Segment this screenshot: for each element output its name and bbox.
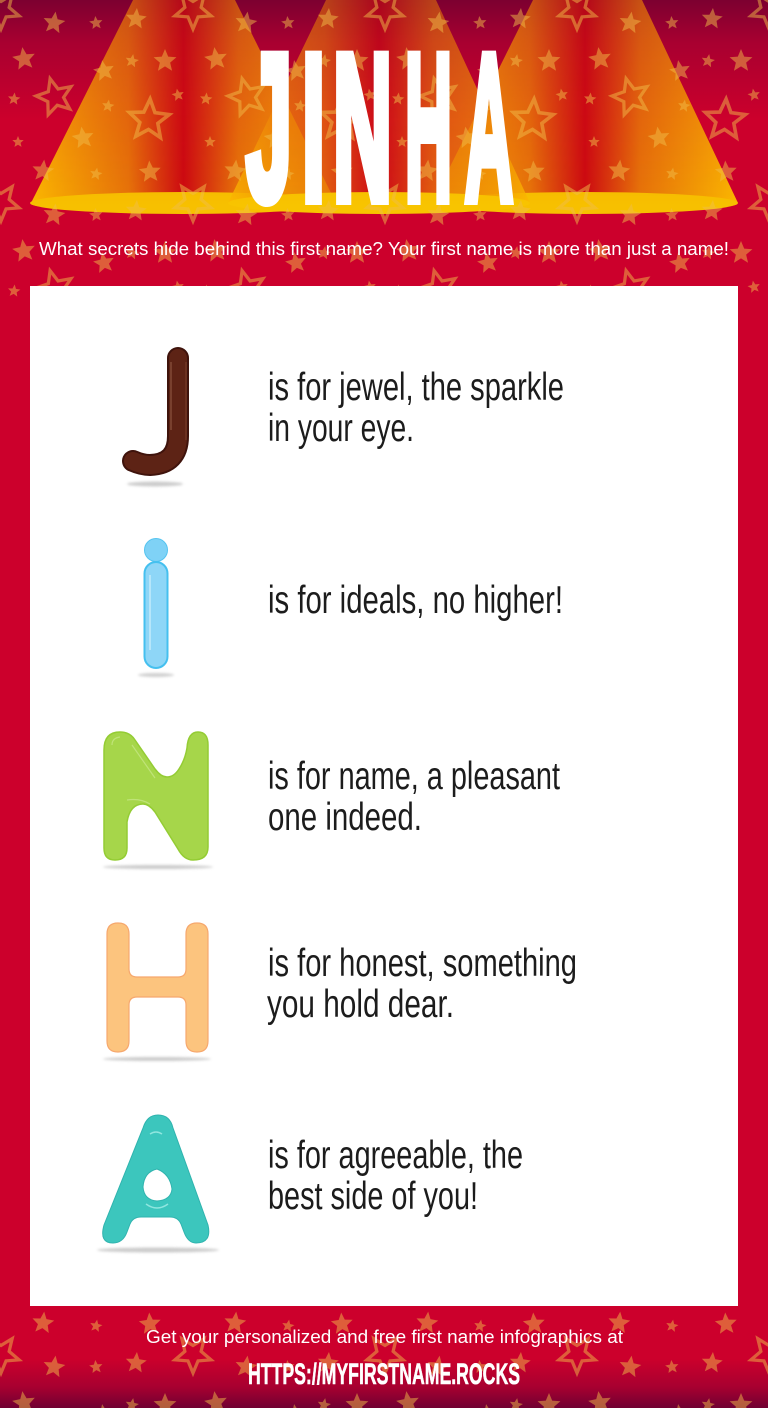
text: A [465,12,513,243]
icon: letter H [103,923,211,1061]
spotlight: left [30,0,336,214]
icon: letter i [138,538,174,677]
icon: letter N [103,732,213,869]
subtitle: What secrets hide behind this first name? Your first name is more than just a name! [39,239,729,259]
text: H [267,942,577,1026]
icon: letter A [97,1115,219,1252]
panel: white content [30,286,738,1306]
icon: letter J [127,358,186,486]
star pattern: bottom [0,1306,768,1408]
row: J [127,358,564,486]
text: A [268,1134,523,1218]
text: J [268,366,564,450]
row: H [103,923,577,1061]
title: J [246,12,292,243]
row: A [97,1115,523,1252]
text: A: best side of you! [268,1175,478,1218]
footer text: Get your personalized and free first name infographics at [146,1327,623,1347]
row: I [138,538,563,677]
text: N: is for name, a pleasant [268,755,560,798]
spotlight: center [228,0,530,214]
spotlights [30,0,738,214]
text: I: is for ideals, no higher! [268,579,563,622]
title: H [405,12,452,243]
text: A: is for agreeable, the [268,1134,523,1177]
title: N [333,12,392,243]
footer url: HTTPS://MYFIRSTNAME.ROCKS [248,1358,520,1391]
text: N: one indeed. [268,796,422,839]
row: N [103,732,560,869]
star pattern: top [0,0,768,300]
text: N [268,755,560,839]
text: H: you hold dear. [267,983,454,1026]
spotlight: right [432,0,738,214]
text: H: is for honest, something [268,942,577,985]
text: J: in your eye. [268,407,414,450]
title: I [302,12,325,243]
text: J: is for jewel, the sparkle [268,366,564,409]
